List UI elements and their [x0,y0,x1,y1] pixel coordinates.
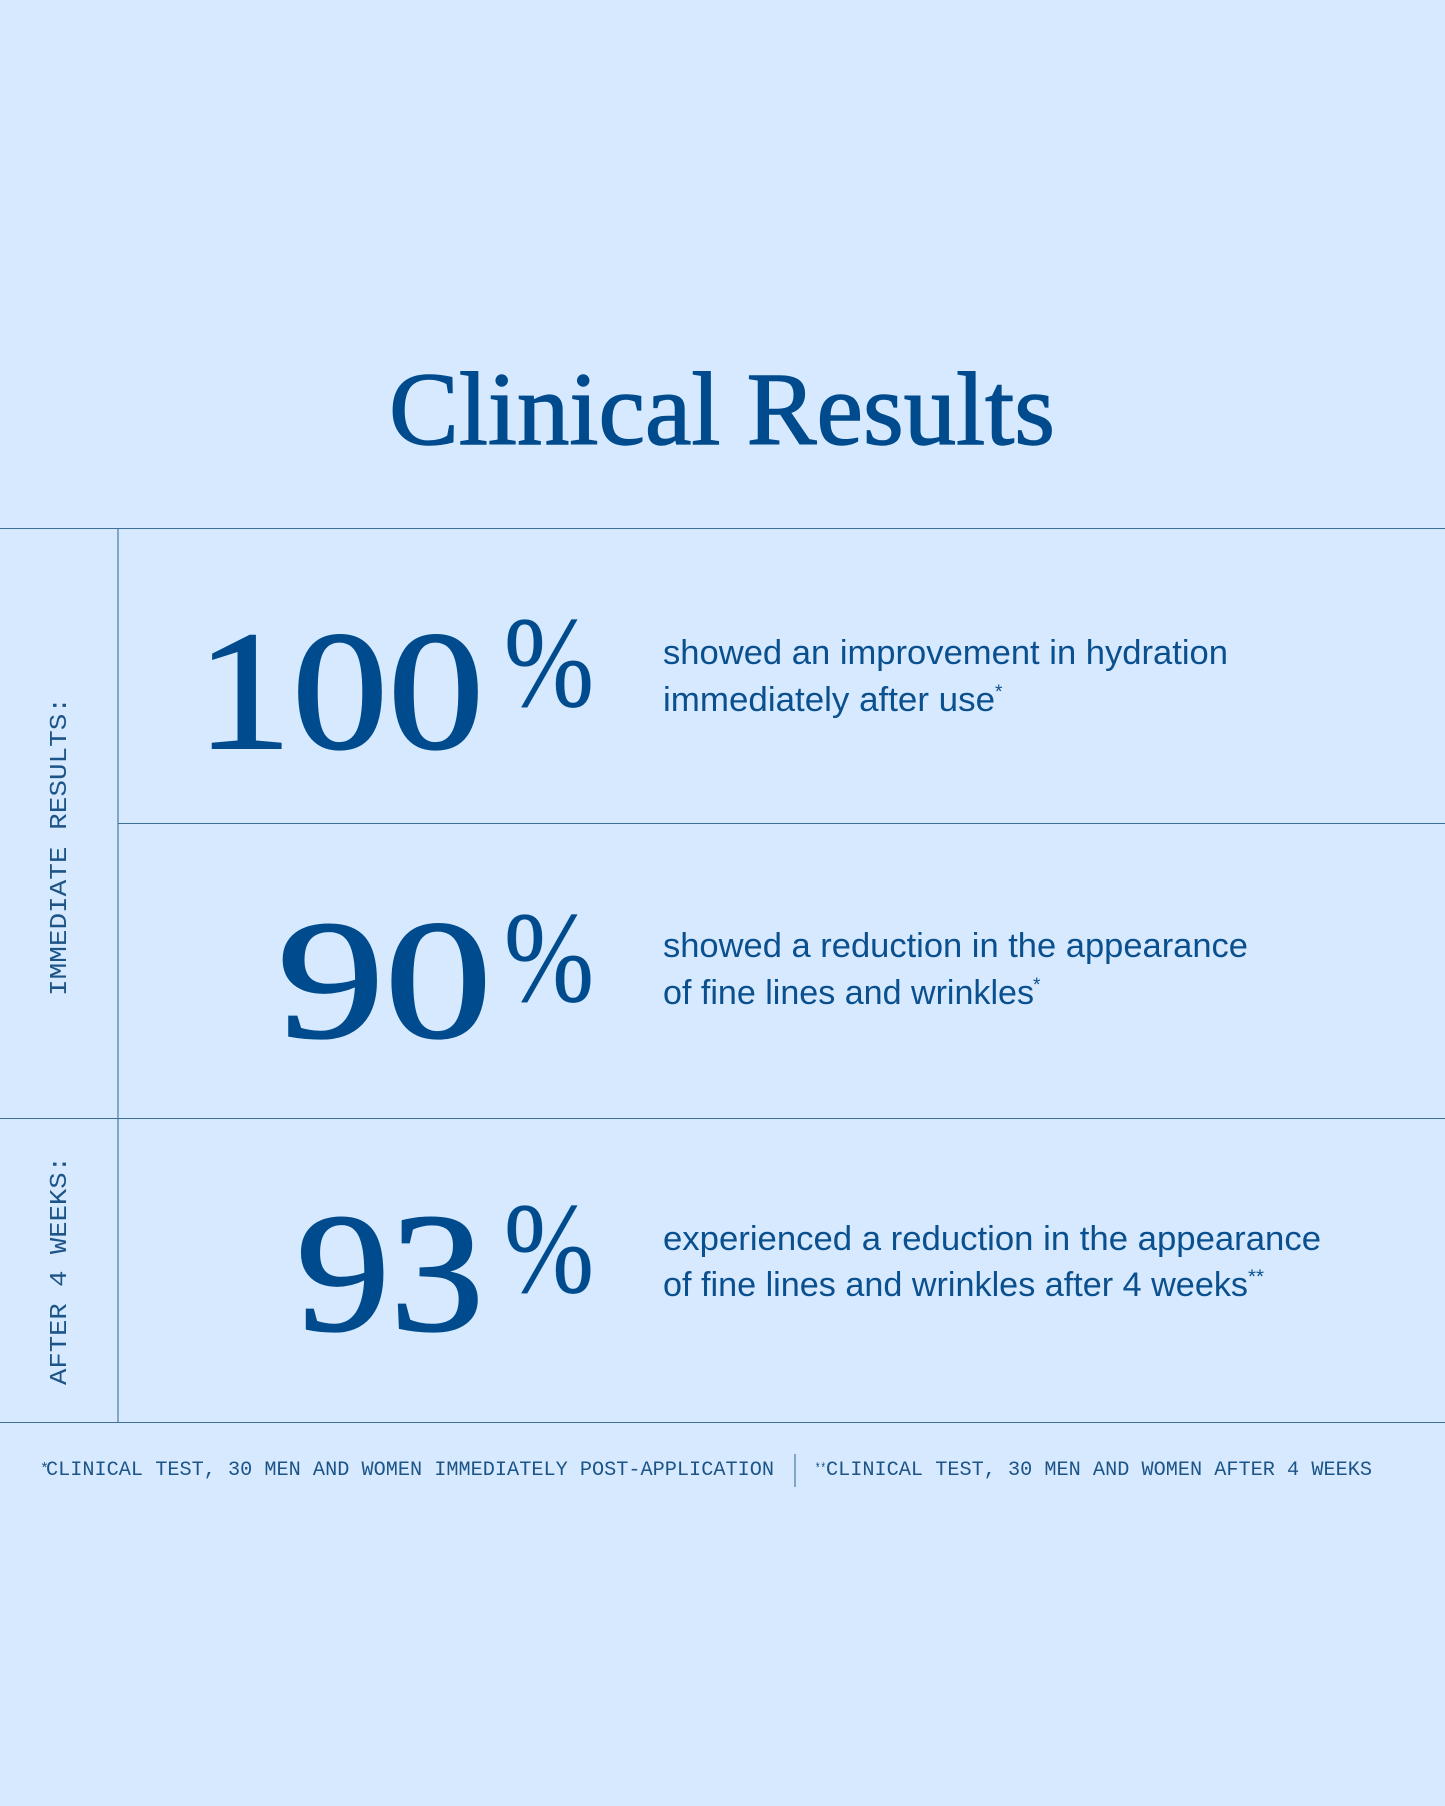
footnote: immediate test: * [40,1461,49,1478]
description [663,634,1228,719]
percent sign: % [504,886,594,1030]
description: experienced a reduction in the appearance [663,1220,1321,1258]
description: showed an improvement in hydration [663,634,1228,672]
side label: after 4 weeks: AFTER 4 WEEKS: [47,1156,74,1385]
description: * [1033,975,1041,996]
description: immediately after use [663,681,995,719]
footnote: immediate test: CLINICAL TEST, 30 MEN AND WOMEN IMMEDIATELY POST-APPLICATION [46,1459,774,1482]
stat: 90: 90 [277,886,492,1074]
percent sign: % [504,1177,594,1321]
description: of fine lines and wrinkles [663,974,1034,1012]
panel: 100 percent hydration [196,591,1228,785]
side label: immediate results: IMMEDIATE RESULTS: [47,697,74,996]
stat: 93: 93 [296,1179,484,1367]
description: ** [1248,1267,1265,1288]
stat: 100: 100 [196,597,484,785]
title: Clinical Results [389,352,1055,467]
description: of fine lines and wrinkles after 4 weeks [663,1266,1248,1304]
description [663,1220,1321,1304]
panel: 93 percent after 4 weeks [296,1177,1321,1367]
footnote: 4 week test: CLINICAL TEST, 30 MEN AND WOMEN AFTER 4 WEEKS [826,1459,1372,1482]
description: * [995,682,1003,703]
description: showed a reduction in the appearance [663,927,1248,965]
percent sign: % [504,591,594,735]
panel: 90 percent fine lines [277,886,1248,1074]
footnote: 4 week test: ** [815,1461,826,1478]
description [663,927,1248,1012]
